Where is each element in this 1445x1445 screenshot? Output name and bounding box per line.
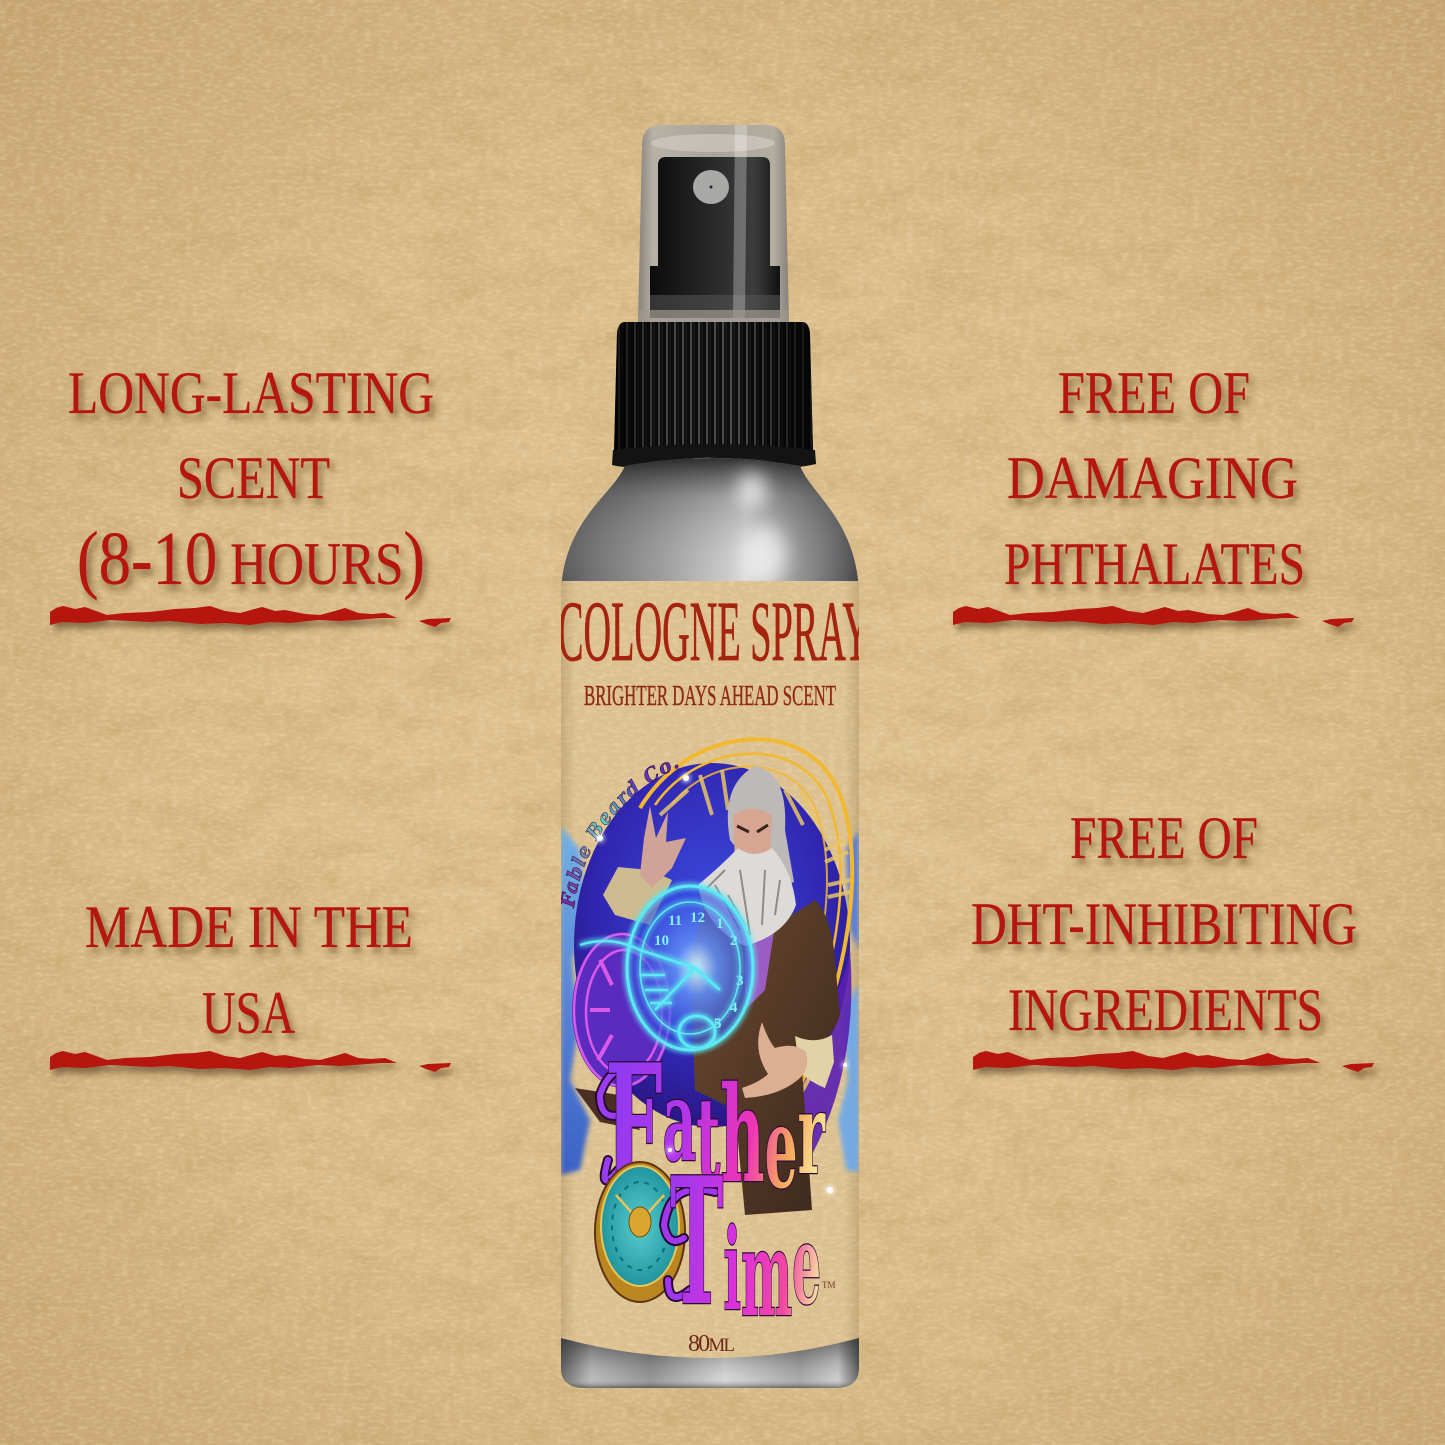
torn red underline: phthalates [953,606,1354,627]
callout: made in the USA: MADE IN THE [85,894,413,960]
callout: made in the USA: USA [202,980,295,1046]
product: spray bottle [561,125,859,1388]
label logo: Father [595,1061,826,1190]
label illustration: pink clock [574,934,670,1086]
callout: free of DHT-inhibiting ingredients: FREE OF [1070,805,1258,871]
label logo: pocket watch [595,1162,685,1302]
callout: long-lasting scent: (8-10 HOURS) [77,517,425,601]
spray nozzle [693,170,729,204]
label illustration: gold clock rings [640,739,852,1112]
sparkles [597,775,847,1193]
callout: free of DHT-inhibiting ingredients: INGREDIENTS [1008,977,1323,1043]
callout: free of damaging phthalates: FREE OF [1058,360,1250,426]
label illustration: wizard coat [575,900,840,1215]
callout: free of damaging phthalates: DAMAGING [1007,445,1298,511]
label illustration: wizard right hand [742,1022,807,1098]
label illustration: wizard left arm and hand [603,806,686,925]
label logo: Father: t [696,1074,720,1205]
label logo: Time: m [741,1204,792,1343]
kraft label [561,581,859,1358]
callout: free of damaging phthalates [1004,360,1305,597]
label illustration: wizard head [698,766,796,946]
clock numerals: 3 [736,973,744,989]
callout: long-lasting scent: SCENT [177,445,330,511]
clock numerals: 4 [730,1000,738,1016]
torn red underline: made in the USA [50,1051,451,1072]
label logo: Father: F [605,1027,663,1232]
callout: free of DHT-inhibiting ingredients [971,805,1357,1043]
clock numerals: 12 [690,910,705,926]
clock numerals: 10 [654,933,669,949]
clear overcap [638,125,789,322]
label logo: Father: a [663,1056,696,1187]
callout: long-lasting scent [68,360,434,601]
torn red underline: long-lasting scent [50,606,451,627]
label logo: Time: i [723,1205,741,1336]
label trademark: TM [822,1280,836,1290]
label illustration: blue smoke [561,826,859,1175]
label subheading: scent name: BRIGHTER DAYS AHEAD SCENT [584,681,836,712]
aluminium shoulder [561,458,859,590]
label logo: Father: e [765,1083,798,1214]
callout: made in the USA [85,894,413,1046]
kraft label: r [798,1069,826,1200]
clock numerals: 2 [730,933,738,949]
callout: free of DHT-inhibiting ingredients: DHT-INHIBITING [971,891,1357,957]
clock numerals: 1 [716,916,724,932]
label illustration: glowing cyan clock [580,886,753,1050]
callout: long-lasting scent: LONG-LASTING [68,360,434,426]
label volume: 80ml: 80ML [688,1331,735,1357]
callout: free of damaging phthalates: PHTHALATES [1004,531,1305,597]
label logo: Time: T [670,1140,723,1345]
aluminium base [561,1330,859,1388]
label illustration: clock disc [572,763,851,1175]
label logo: Fable Beard Co.: Fable Beard Co. [561,762,678,909]
ribbed collar [612,322,816,468]
infographic canvas: COLOGNE SPRAY [558,583,870,679]
kraft label: e [792,1200,821,1329]
clock numerals: 5 [714,1016,722,1032]
clock numerals [654,910,744,1032]
label logo: Father: h [720,1058,765,1213]
torn red underline: ingredients [973,1051,1374,1072]
clock numerals: 11 [668,913,682,929]
